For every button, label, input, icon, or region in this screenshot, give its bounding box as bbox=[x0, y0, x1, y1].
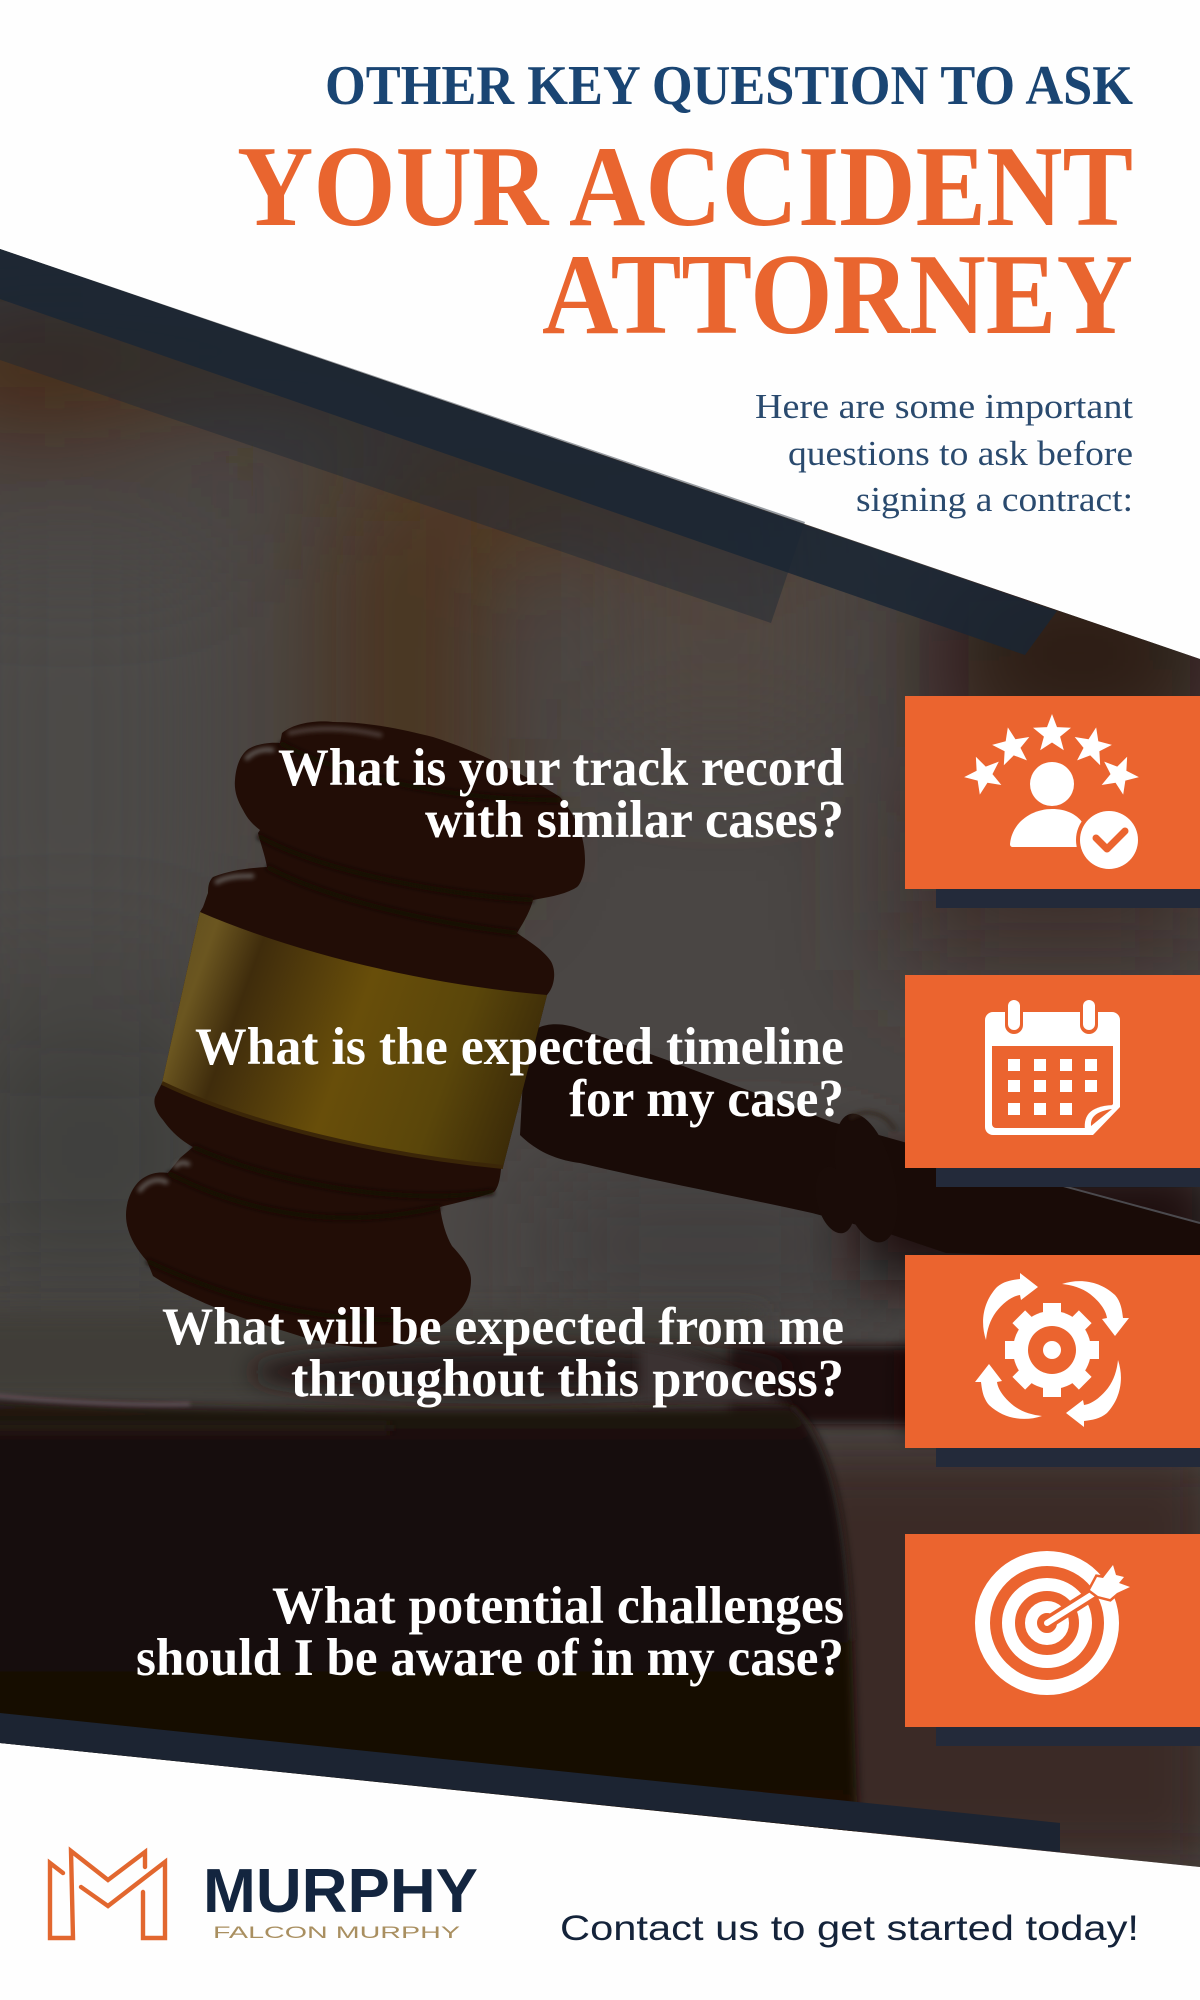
icon: gear with circular arrows bbox=[975, 1273, 1129, 1427]
gold band bbox=[162, 912, 547, 1167]
heading: your accident attorney bbox=[237, 123, 1133, 358]
question 1: What is your track record bbox=[278, 739, 844, 797]
panel: icon card 2 timeline bbox=[905, 975, 1200, 1187]
sound block bbox=[0, 1394, 862, 1832]
question 3: What will be expected from me bbox=[162, 1298, 844, 1356]
heading: your accident attorney: YOUR ACCIDENT bbox=[237, 123, 1133, 250]
table surface and shadow bbox=[0, 1316, 905, 1438]
call to action: Contact us to get started today! bbox=[560, 1909, 1139, 1948]
logo: Murphy Falcon Murphy bbox=[50, 1851, 478, 1942]
icon: five stars and checked person bbox=[959, 714, 1144, 873]
intro text: questions to ask before bbox=[788, 434, 1133, 473]
question 3: throughout this process? bbox=[291, 1350, 844, 1408]
gavel handle bbox=[520, 1024, 1200, 1262]
panel: icon card 3 process bbox=[905, 1255, 1200, 1467]
intro text bbox=[755, 387, 1133, 519]
bottom diagonal band bbox=[0, 1713, 1060, 1852]
question 3 bbox=[162, 1298, 844, 1408]
intro text: Here are some important bbox=[755, 387, 1133, 426]
question 4: should I be aware of in my case? bbox=[136, 1629, 844, 1687]
grooves bbox=[147, 743, 560, 1320]
question 1 bbox=[278, 739, 844, 849]
question 2: What is the expected timeline bbox=[195, 1018, 844, 1076]
question 2: for my case? bbox=[569, 1070, 844, 1128]
highlights bbox=[140, 729, 380, 1190]
head silhouette bbox=[126, 721, 585, 1347]
icon: calendar bbox=[985, 996, 1120, 1135]
question 2 bbox=[195, 1018, 844, 1128]
question 4 bbox=[136, 1577, 844, 1687]
intro text: signing a contract: bbox=[856, 480, 1133, 519]
logo mark bbox=[50, 1851, 165, 1938]
logo subtitle: FALCON MURPHY bbox=[213, 1923, 460, 1942]
question 1: with similar cases? bbox=[425, 791, 844, 849]
question 4: What potential challenges bbox=[272, 1577, 844, 1635]
heading: other key question to ask: OTHER KEY QUESTION TO ASK bbox=[325, 55, 1133, 117]
logo wordmark: MURPHY bbox=[203, 1857, 478, 1926]
panel: icon card 1 rating bbox=[905, 696, 1200, 908]
gavel head bbox=[126, 721, 585, 1347]
top diagonal band: narrow navy layer bbox=[0, 249, 1057, 655]
icon: target with arrow bbox=[982, 1558, 1130, 1688]
panel: icon card 4 challenges bbox=[905, 1534, 1200, 1746]
top diagonal band: wider translucent layer bbox=[0, 249, 805, 623]
heading: your accident attorney: ATTORNEY bbox=[542, 231, 1133, 358]
